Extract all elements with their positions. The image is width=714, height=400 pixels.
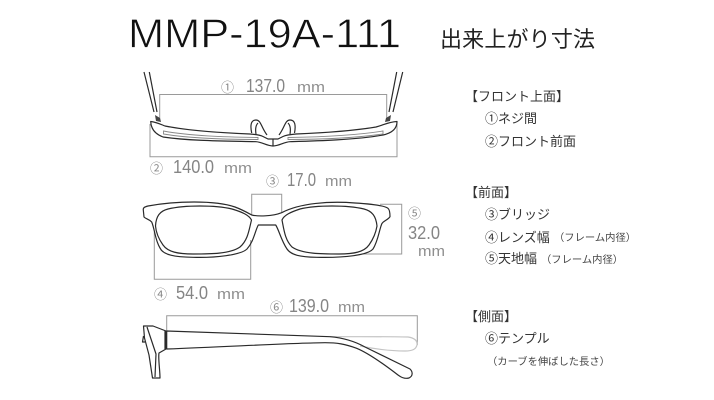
- measurement 5: 32.0 mm: [408, 206, 445, 260]
- legend: front: （フレーム内径）: [541, 253, 623, 266]
- measurement 4: 54.0 mm: [154, 283, 245, 303]
- hinges: [155, 115, 391, 122]
- legend: front top: 【フロント上面】: [465, 89, 569, 104]
- legend: side: ⑥テンプル: [485, 331, 550, 346]
- center line of bridge: [272, 139, 274, 146]
- measurement 1: 137.0 mm: ①: [221, 80, 234, 95]
- temple: [167, 331, 412, 378]
- legend: front: ④レンズ幅: [485, 230, 550, 245]
- measurement 2: 140.0 mm: 140.0: [173, 157, 214, 177]
- nose pads: [251, 120, 295, 135]
- frame front in profile: [142, 326, 166, 378]
- dimension line: temple length: [167, 316, 417, 345]
- lens strip right: [288, 131, 383, 140]
- measurement 6: 139.0 mm: [270, 296, 365, 316]
- measurement 3: 17.0 mm: [266, 170, 352, 190]
- legend: side: [465, 309, 610, 368]
- legend: front top: ②フロント前面: [485, 134, 576, 149]
- legend: front: [465, 185, 636, 266]
- dimension lines: bridge, lens width, lens height: [154, 194, 402, 279]
- straightened temple tip in gray: [330, 337, 417, 351]
- left lens: [156, 206, 252, 254]
- measurement 4: 54.0 mm: ④: [154, 287, 167, 302]
- legend: front: ③ブリッジ: [485, 207, 550, 222]
- legend: front: ⑤天地幅: [485, 251, 537, 266]
- measurement 2: 140.0 mm: ②: [150, 161, 163, 176]
- measurement 5: 32.0 mm: 32.0: [408, 223, 440, 243]
- legend: front top: ①ネジ間: [485, 111, 537, 126]
- measurement 2: 140.0 mm: [150, 157, 252, 177]
- measurement 3: 17.0 mm: mm: [325, 173, 352, 190]
- measurement 5: 32.0 mm: ⑤: [408, 206, 421, 221]
- title: model number: MMP-19A-111: [128, 10, 401, 56]
- temples seen from above: [144, 72, 403, 112]
- diagram: side view: [142, 316, 417, 378]
- front frame outline: [151, 122, 397, 146]
- measurement 6: 139.0 mm: 139.0: [289, 296, 329, 316]
- legend: side: 【側面】: [465, 309, 517, 324]
- measurement 1: 137.0 mm: 137.0: [246, 76, 285, 96]
- legend: front top: [465, 89, 576, 149]
- dimension lines: screw distance and front width: [150, 94, 397, 157]
- diagram: front view: [143, 194, 402, 279]
- measurement 5: 32.0 mm: mm: [418, 243, 445, 260]
- hinge: [164, 331, 166, 349]
- measurement 4: 54.0 mm: mm: [217, 286, 245, 303]
- measurement 3: 17.0 mm: 17.0: [287, 170, 316, 190]
- legend: front: （フレーム内径）: [554, 231, 636, 244]
- measurement 4: 54.0 mm: 54.0: [176, 283, 208, 303]
- measurement 3: 17.0 mm: ③: [266, 174, 279, 189]
- legend: side: （カーブを伸ばした長さ）: [487, 355, 610, 368]
- diagram: top view of front: [144, 72, 403, 157]
- measurement 2: 140.0 mm: mm: [224, 160, 252, 177]
- lens strip left: [164, 131, 258, 140]
- measurement 1: 137.0 mm: mm: [297, 79, 325, 96]
- measurement 1: 137.0 mm: [221, 76, 325, 96]
- right lens: [282, 206, 377, 254]
- measurement 6: 139.0 mm: ⑥: [270, 300, 283, 315]
- measurement 6: 139.0 mm: mm: [338, 299, 365, 316]
- frame outer outline: [143, 202, 390, 257]
- legend: front: 【前面】: [465, 185, 517, 200]
- subtitle: finished dimensions: 出来上がり寸法: [440, 27, 595, 52]
